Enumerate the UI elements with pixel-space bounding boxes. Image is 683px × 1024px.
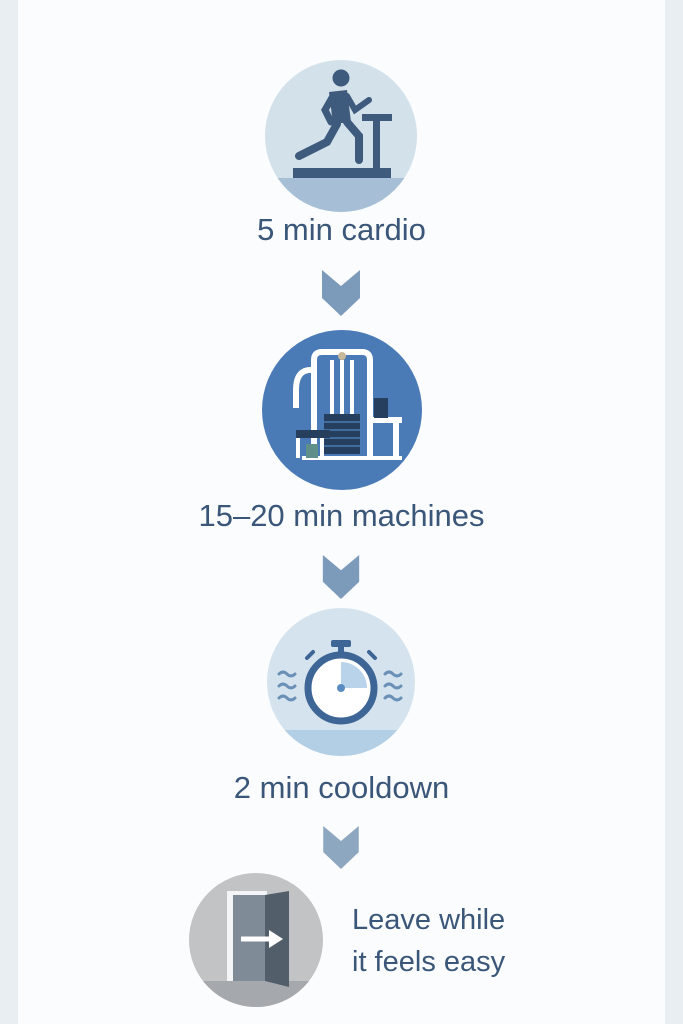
label: 2 min cooldown: 2 min cooldown xyxy=(234,770,449,805)
arrow 3 xyxy=(323,826,359,869)
arrow 1 xyxy=(322,270,360,316)
arrow 2 xyxy=(322,555,360,599)
icon: gym machine xyxy=(262,330,422,490)
label: 15–20 min machines: 15–20 min machines xyxy=(198,498,485,533)
icon: exit door xyxy=(189,873,323,1007)
label: Leave while it feels easy: Leave while xyxy=(352,904,505,936)
label: Leave while it feels easy: it feels easy xyxy=(352,946,505,978)
label: 5 min cardio: 5 min cardio xyxy=(257,212,426,247)
label: Leave while it feels easy xyxy=(352,904,505,978)
icon: stopwatch xyxy=(267,608,415,756)
icon: treadmill runner xyxy=(265,60,417,212)
